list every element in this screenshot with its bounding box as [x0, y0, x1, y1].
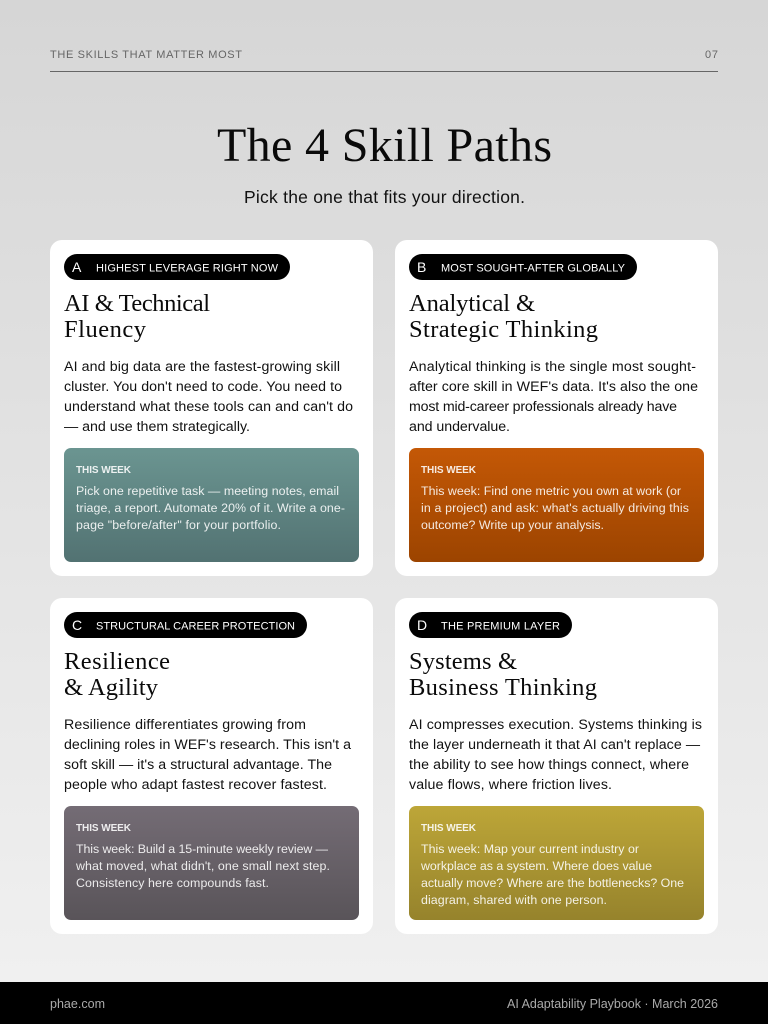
description: A	[64, 359, 353, 435]
heading: B: Strategic Thinking	[409, 316, 598, 343]
description: D: the layer underneath it that AI can't replace —	[409, 737, 701, 753]
callout: D this week: THIS WEEK	[421, 823, 477, 834]
callout: A this week	[64, 448, 359, 562]
badge: B	[409, 254, 637, 280]
heading: C: Resilience	[64, 648, 170, 675]
badge: D: D	[417, 617, 427, 633]
heading: B: Analytical &	[409, 290, 535, 317]
panel: D Systems & Business Thinking	[395, 598, 718, 934]
footer	[0, 982, 768, 1024]
badge: D	[409, 612, 572, 638]
callout: A this week: Pick one repetitive task — meeting notes, email	[76, 484, 339, 498]
callout: D this week: diagram, shared with one person.	[421, 893, 607, 907]
description: C: soft skill — it's a structural advantage. The	[64, 757, 332, 773]
badge: A: HIGHEST LEVERAGE RIGHT NOW	[96, 262, 279, 274]
description: D: AI compresses execution. Systems thinking is	[409, 717, 702, 733]
page header	[50, 49, 718, 72]
description: D: the ability to see how things connect, where	[409, 757, 689, 773]
description: A: cluster. You don't need to code. You need to	[64, 379, 342, 395]
description: B	[409, 359, 698, 435]
panel: C Resilience & Agility	[50, 598, 373, 934]
callout: B this week: This week: Find one metric you own at work (or	[421, 484, 681, 498]
callout: B this week	[409, 448, 704, 562]
heading: D: Systems &	[409, 648, 517, 675]
footer: AI Adaptability Playbook · March 2026	[507, 997, 718, 1011]
callout: C this week	[64, 806, 359, 920]
badge: C	[64, 612, 307, 638]
heading: A: AI & Technical	[64, 290, 210, 317]
callout: D this week: This week: Map your current industry or	[421, 842, 639, 856]
heading: C	[64, 648, 170, 701]
callout: A this week: triage, a report. Automate 20% of it. Write a one-	[76, 501, 345, 515]
callout: D this week	[409, 806, 704, 920]
callout: C this week: This week: Build a 15-minute weekly review —	[76, 842, 329, 856]
badge: C: C	[72, 617, 82, 633]
description: A: understand what these tools can and can't do	[64, 399, 353, 415]
callout: B this week: outcome? Write up your analysis.	[421, 518, 604, 532]
badge: D: THE PREMIUM LAYER	[441, 620, 560, 632]
badge: A: A	[72, 259, 82, 275]
page header: THE SKILLS THAT MATTER MOST	[50, 49, 242, 61]
callout: D this week: actually move? Where are the bottlenecks? One	[421, 876, 684, 890]
panel: A AI & Technical Fluency	[50, 240, 373, 576]
description: D	[409, 717, 702, 793]
page header: 07	[705, 49, 718, 61]
callout: C this week: Consistency here compounds fast.	[76, 876, 269, 890]
badge: B: MOST SOUGHT-AFTER GLOBALLY	[441, 262, 626, 274]
description: B: after core skill in WEF's data. It's also the one	[409, 379, 698, 395]
description: B: most mid-career professionals already have	[409, 399, 677, 415]
title: The 4 Skill Paths	[217, 119, 552, 172]
heading: D	[409, 648, 597, 701]
heading: D: Business Thinking	[409, 674, 597, 701]
callout: A this week: THIS WEEK	[76, 465, 132, 476]
subtitle: Pick the one that fits your direction.	[244, 187, 525, 207]
heading: A: Fluency	[64, 316, 147, 343]
callout: D this week: workplace as a system. Where does value	[420, 859, 652, 873]
panel: B Analytical & Strategic Thinking	[395, 240, 718, 576]
heading: B	[409, 290, 598, 343]
badge: B: B	[417, 259, 426, 275]
callout: C this week: THIS WEEK	[76, 823, 132, 834]
footer: phae.com	[50, 997, 105, 1011]
callout: C this week: what moved, what didn't, one small next step.	[75, 859, 330, 873]
description: C: people who adapt fastest recover fastest.	[64, 777, 327, 793]
badge: C: STRUCTURAL CAREER PROTECTION	[96, 620, 295, 632]
description: B: and undervalue.	[409, 419, 510, 435]
description: C: Resilience differentiates growing from	[64, 717, 306, 733]
badge: A	[64, 254, 290, 280]
description: A: — and use them strategically.	[64, 419, 250, 435]
description: C: declining roles in WEF's research. This isn't a	[64, 737, 351, 753]
description: A: AI and big data are the fastest-growing skill	[64, 359, 340, 375]
description: B: Analytical thinking is the single most sought-	[409, 359, 696, 375]
description: C	[64, 717, 351, 793]
callout: B this week: in a project) and ask: what's actually driving this	[421, 501, 689, 515]
description: D: value flows, where friction lives.	[409, 777, 612, 793]
heading: A	[64, 290, 210, 343]
callout: B this week: THIS WEEK	[421, 465, 477, 476]
heading: C: & Agility	[64, 674, 159, 701]
callout: A this week: page "before/after" for your portfolio.	[76, 518, 281, 532]
